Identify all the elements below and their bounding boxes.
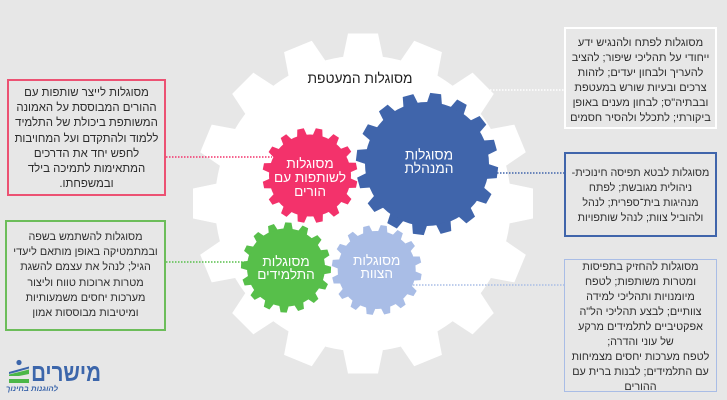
outer white gear [193, 34, 533, 374]
pink gear: partnership with parents: מסוגלות [286, 156, 334, 171]
green gear: students [241, 222, 331, 313]
pink gear: partnership with parents [262, 128, 358, 223]
connector: blue [497, 172, 564, 174]
pink gear: partnership with parents: לשותפות עם [274, 170, 346, 185]
text box: envelope competencies: צרכים ובעיות שורש במעטפת [574, 82, 707, 94]
connector: green [166, 261, 246, 263]
text box: team: ומטרות משותפות; לטפח [585, 276, 696, 288]
text box: management [564, 152, 717, 237]
text box: management: ניהולית מגובשת; לפתח [589, 182, 692, 194]
text box: parents [7, 79, 166, 196]
text box: parents: ההורים המבוססת על האמונה [16, 102, 157, 114]
logo: Mishrim: מישרים [31, 359, 101, 387]
text box: students: מסוגלות להשתמש בשפה [28, 231, 143, 243]
text box: team: עם התלמידים; לבנות ברית עם [572, 366, 709, 378]
text box: team: ההורים [624, 381, 657, 393]
text box: parents: לחפש יחד את הדרכים [34, 148, 139, 160]
text box: management: מנהיגות בית־ספרית; לנהל [582, 197, 699, 209]
text box: envelope competencies: ייחודי על תהליכי שיפור; להציב [572, 52, 709, 64]
green gear: students: מסוגלות [262, 254, 310, 269]
text box: team: צוותיים; לבצע תהליכי הל"ה [579, 306, 702, 318]
text box: team [564, 259, 717, 392]
text box: envelope competencies: ובבתיה"ס; לבחון מענים באופן [573, 97, 708, 109]
text box: students: ומיטיבות מבוססות אמון [32, 307, 139, 319]
heading: envelope competencies: מסוגלות המעטפת [308, 71, 412, 86]
text box: management: ולהוביל צוות; לנהל שותפויות [578, 212, 703, 224]
blue gear: management [356, 93, 498, 235]
blue gear: management: המנהלת [405, 161, 453, 176]
text box: students: ובמתמטיקה באופן מותאם ליעדי [13, 246, 158, 258]
text box: parents: המתאימות לתמיכה בילד [28, 163, 145, 175]
text box: team: לטפח מערכות יחסים מצמיחות [572, 351, 709, 363]
text box: envelope competencies [564, 27, 717, 129]
light blue gear: team: הצוות [360, 266, 393, 281]
text box: parents: ובמשפחתו. [59, 178, 114, 190]
logo: Mishrim: להוגנות בחינוך [6, 384, 58, 393]
text box: team: אפקטיביים לתלמידים מרקע [578, 321, 703, 333]
connector: light blue [410, 284, 564, 286]
light blue gear: team: מסוגלות [353, 253, 400, 268]
light blue gear: team [332, 225, 422, 315]
text box: parents: מסוגלות לייצר שותפות עם [24, 87, 149, 99]
pink gear: partnership with parents: הורים [294, 184, 326, 199]
text box: management: מסוגלות לבטא תפיסה חינוכית- [572, 167, 709, 179]
text box: envelope competencies: להעריך ולבחון יעדים; לזהות [578, 67, 703, 79]
text box: students: מערכות יחסים משמעותיות [26, 292, 145, 304]
text box: parents: המשותפת ביכולת של התלמיד [15, 117, 158, 129]
blue gear: management: מסוגלות [405, 148, 453, 162]
text box: parents: ללמוד ולהתקדם ועל המחויבות [15, 133, 158, 145]
text box: students: הגיל; לנהל את עצמם להשגת [20, 261, 151, 273]
text box: students [5, 220, 166, 331]
green gear: students: התלמידים [257, 267, 315, 282]
connector: white [490, 89, 564, 91]
text box: team: של עוני והדרה; [607, 336, 674, 348]
text box: envelope competencies: מסוגלות לפתח ולהנגיש ידע [578, 37, 703, 49]
text box: envelope competencies: ביקורתי; לתכלל ולהסיר חסמים [570, 112, 711, 124]
connector: pink [166, 156, 272, 158]
logo: Mishrim [6, 359, 101, 393]
text box: team: מסוגלות להחזיק בתפיסות [582, 261, 699, 273]
text box: team: מיומנויות ותהליכי למידה [586, 291, 695, 303]
text box: students: מטרות ארוכות טווח וליצור [27, 277, 144, 289]
